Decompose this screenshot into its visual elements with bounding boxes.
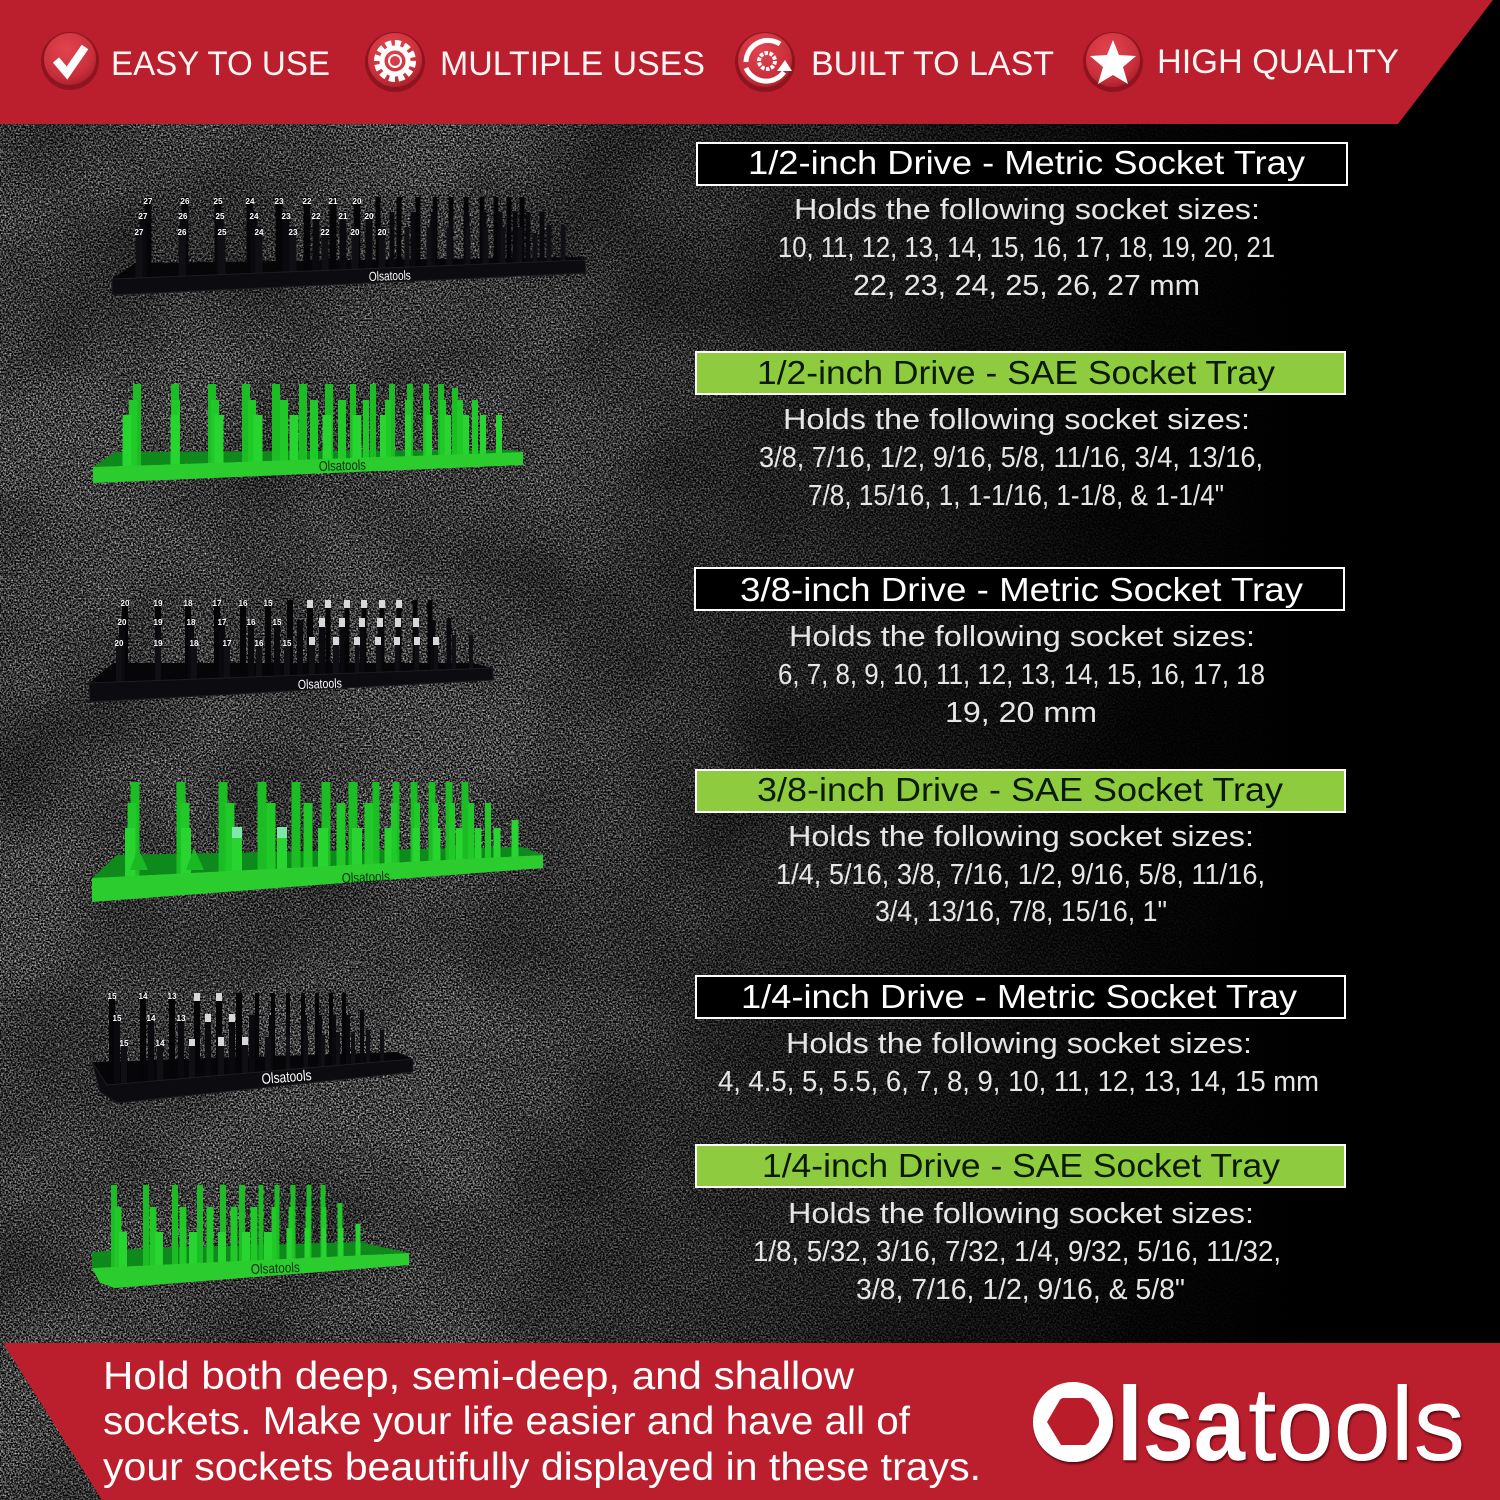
tray logo: Olsatools [341,868,390,886]
socket size labels [108,992,186,1048]
size list: 6, 7, 8, 9, 10, 11, 12, 13, 14, 15, 16, 17, 18 [778,659,1265,691]
socket size labels: 27 [139,212,148,221]
tray logo: Olsatools [261,1067,312,1088]
tray: black 1/2-inch metric [112,197,586,295]
socket size labels: 14 [139,992,148,1001]
socket size labels: 23 [282,212,291,221]
socket size labels: 21 [339,212,348,221]
socket size labels: 15 [283,639,292,648]
panel: 3/8-inch SAE sizes [696,770,1345,928]
socket size labels: 17 [213,599,222,608]
heading bar: 1/2-inch Drive - SAE Socket Tray [757,354,1276,391]
size list: 4, 4.5, 5, 5.5, 6, 7, 8, 9, 10, 11, 12, 13, 14, 15 mm [718,1066,1319,1098]
socket size labels: 15 [108,992,117,1001]
heading bar: 3/8-inch Drive - Metric Socket Tray [740,571,1304,608]
socket size labels: 18 [190,639,199,648]
heading bar [696,352,1345,394]
socket size labels: 18 [184,599,193,608]
socket size labels: 16 [255,639,264,648]
heading bar [696,770,1345,812]
size list: Holds the following socket sizes: [789,621,1255,653]
panel: 3/8-inch metric sizes [695,568,1344,729]
socket size labels [135,197,387,237]
size list [753,1198,1281,1306]
top banner [0,0,1493,124]
size list: 22, 23, 24, 25, 26, 27 mm [853,270,1200,302]
size list: 1/8, 5/32, 3/16, 7/32, 1/4, 9/32, 5/16, 11/32, [753,1236,1281,1268]
tray: green 1/2-inch SAE [93,384,523,483]
socket size labels: 23 [289,228,298,237]
socket size labels: 13 [177,1014,186,1023]
label: easy to use: EASY TO USE [111,45,330,83]
socket size labels: 20 [353,197,362,206]
socket size labels: 16 [239,599,248,608]
brand logo: O [1033,1362,1113,1483]
socket size labels: 26 [179,212,188,221]
heading bar: 1/2-inch Drive - Metric Socket Tray [748,144,1306,181]
heading bar: 1/4-inch Drive - SAE Socket Tray [762,1147,1281,1184]
label: high quality: HIGH QUALITY [1157,43,1399,81]
footer message [103,1355,981,1489]
socket size labels: 24 [250,212,259,221]
socket size labels: 15 [113,1014,122,1023]
socket size labels: 24 [246,197,255,206]
tray logo: Olsatools [250,1259,300,1277]
socket size labels [115,599,292,648]
size list [778,621,1265,729]
socket size labels: 19 [154,618,163,627]
panel: 1/2-inch metric sizes [697,143,1347,302]
socket size labels: 20 [351,228,360,237]
socket size labels: 20 [121,599,130,608]
size list: Holds the following socket sizes: [788,1198,1254,1230]
socket size labels: 13 [168,992,177,1001]
icon: star [1083,32,1143,92]
socket size labels: 19 [154,599,163,608]
socket size labels: 18 [187,618,196,627]
icon: refresh gear [735,32,795,92]
tray: green 1/4-inch SAE [92,1185,409,1288]
socket size labels: 17 [223,639,232,648]
socket size labels: 22 [303,197,312,206]
tray: black 3/8-inch metric [89,599,493,702]
socket size labels: 26 [181,197,190,206]
brand logo: lsa [1117,1366,1246,1483]
icon: gear [365,32,425,92]
panel: 1/4-inch SAE sizes [696,1145,1345,1306]
socket size labels: 14 [156,1039,165,1048]
socket size labels: 15 [264,599,273,608]
footer message: Hold both deep, semi-deep, and shallow [103,1355,855,1398]
footer message: your sockets beautifully displayed in these trays. [103,1446,981,1489]
tray logo: Olsatools [319,457,366,474]
panel: 1/2-inch SAE sizes [696,352,1345,512]
socket size labels: 15 [120,1039,129,1048]
size list [776,821,1265,928]
size list: 10, 11, 12, 13, 14, 15, 16, 17, 18, 19, 20, 21 [778,232,1275,264]
heading bar [696,976,1345,1018]
heading bar: 3/8-inch Drive - SAE Socket Tray [757,771,1284,808]
socket size labels: 22 [312,212,321,221]
size list: 3/4, 13/16, 7/8, 15/16, 1" [875,896,1167,928]
socket size labels: 25 [216,212,225,221]
size list [778,194,1275,302]
socket size labels: 25 [214,197,223,206]
heading bar [696,1145,1345,1187]
size list: 3/8, 7/16, 1/2, 9/16, 5/8, 11/16, 3/4, 13/16, [759,442,1263,474]
brand logo: tools [1248,1366,1465,1483]
tray logo: Olsatools [369,268,411,284]
label: multiple uses: MULTIPLE USES [440,45,705,83]
panel: 1/4-inch metric sizes [696,976,1345,1098]
label: built to last: BUILT TO LAST [811,45,1054,83]
tray: black 1/4-inch metric [92,992,413,1103]
socket size labels: 22 [321,228,330,237]
footer message: sockets. Make your life easier and have all of [103,1400,910,1443]
size list: Holds the following socket sizes: [788,821,1254,853]
socket size labels: 19 [154,639,163,648]
heading bar: 1/4-inch Drive - Metric Socket Tray [741,978,1298,1015]
socket size labels: 27 [144,197,153,206]
socket size labels: 20 [378,228,387,237]
socket size labels: 17 [218,618,227,627]
tray logo: Olsatools [298,675,342,692]
size list: Holds the following socket sizes: [786,1028,1252,1060]
socket size labels: 27 [135,228,144,237]
bottom banner [3,1343,1500,1500]
socket size labels: 16 [247,618,256,627]
size list: 3/8, 7/16, 1/2, 9/16, & 5/8" [856,1274,1185,1306]
size list: 7/8, 15/16, 1, 1-1/16, 1-1/8, & 1-1/4" [808,480,1224,512]
size list: 19, 20 mm [945,697,1097,729]
size list: 1/4, 5/16, 3/8, 7/16, 1/2, 9/16, 5/8, 11/16, [776,859,1265,891]
socket size labels: 20 [115,639,124,648]
icon: check mark [41,32,99,90]
tray: green 3/8-inch SAE [92,782,543,902]
socket size labels: 24 [255,228,264,237]
socket size labels: 20 [365,212,374,221]
socket size labels: 26 [178,228,187,237]
socket size labels: 25 [218,228,227,237]
socket size labels: 15 [273,618,282,627]
brand logo [1033,1362,1465,1483]
socket size labels: 20 [118,618,127,627]
size list [759,404,1263,512]
size list: Holds the following socket sizes: [794,194,1260,226]
socket size labels: 14 [147,1014,156,1023]
heading bar [695,568,1344,610]
size list: Holds the following socket sizes: [783,404,1250,436]
heading bar [697,143,1347,185]
size list [718,1028,1319,1098]
socket size labels: 23 [275,197,284,206]
socket size labels: 21 [329,197,338,206]
